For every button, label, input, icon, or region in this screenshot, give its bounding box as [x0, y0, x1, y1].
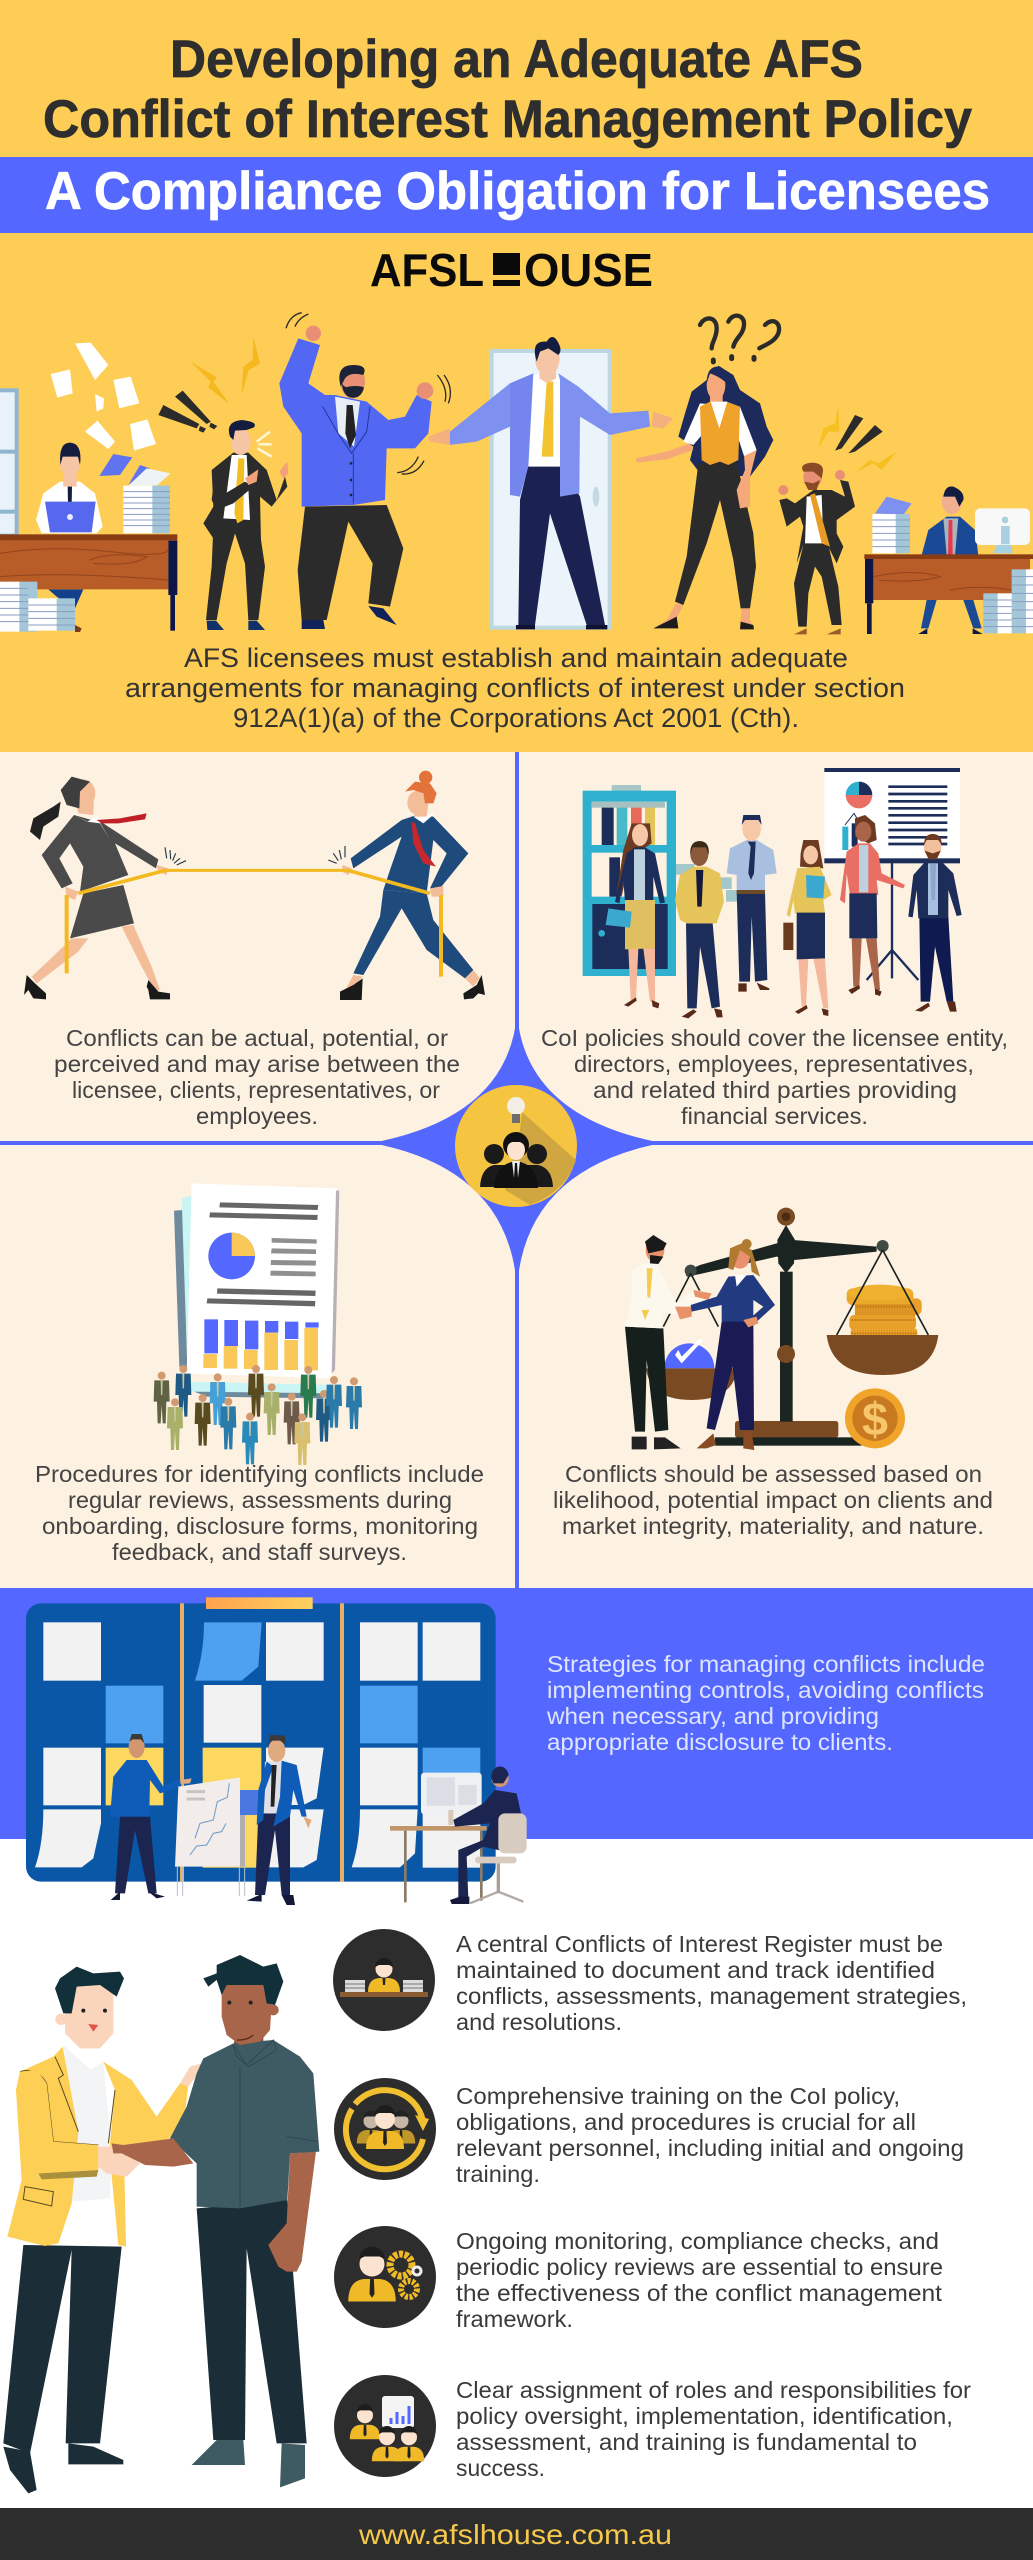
text: Comprehensive training on the CoI policy,: [456, 2083, 900, 2109]
blue dividers and star: [0, 752, 1033, 1588]
man in yellow shirt: [675, 841, 724, 1018]
hero illustration: office conflict scene right: [428, 316, 1033, 634]
handshake and yellow sleeve: [16, 2070, 193, 2177]
hero paragraph: 912A(1)(a) of the Corporations Act 2001 (Cth).: [233, 703, 799, 733]
blue strategies band: [0, 1588, 1033, 1839]
panel text: conflict types: Conflicts can be actual, potential, or: [66, 1025, 448, 1051]
hero paragraph: [125, 643, 905, 733]
desk: [0, 534, 177, 631]
paper stack on desk: [123, 486, 170, 533]
icon: person with gears: [334, 2226, 436, 2328]
man in blue sweater: [110, 1734, 192, 1900]
icon: presentation: [334, 2375, 436, 2477]
strategies text: Strategies for managing conflicts include: [547, 1651, 985, 1677]
hero paragraph: arrangements for managing conflicts of interest under section: [125, 673, 905, 703]
panel: assessing conflicts (scales): [625, 1208, 938, 1450]
bookshelf: [583, 785, 738, 976]
crowd of small figures: [154, 1365, 362, 1465]
small angry man: [203, 420, 288, 630]
coins on scale pan: [827, 1250, 938, 1448]
text: policy oversight, implementation, identification,: [456, 2403, 953, 2429]
panel: policy coverage (team): [583, 768, 962, 1018]
lightning bolts: [190, 337, 260, 404]
door: [492, 351, 610, 628]
man in blue shirt: [727, 815, 777, 992]
balance scale: [646, 1208, 889, 1446]
floor paper stacks: [0, 582, 75, 632]
panel text: policy coverage: CoI policies should cover the licensee entity,: [541, 1025, 1008, 1051]
subtitle band: A Compliance Obligation for Licensees: [45, 162, 990, 221]
paper stack on right desk: [872, 497, 912, 553]
panel text: conflict types: employees.: [196, 1103, 318, 1129]
logo: AFSL: [370, 244, 484, 296]
icon: register desk: [333, 1929, 435, 2031]
question marks: [700, 316, 779, 362]
panel text: identifying conflicts: feedback, and staff surveys.: [112, 1539, 407, 1565]
text: the effectiveness of the conflict management: [456, 2280, 942, 2306]
text: maintained to document and track identified: [456, 1957, 935, 1983]
seated worker: [36, 443, 103, 632]
panel text: identifying conflicts: regular reviews, assessments during: [68, 1487, 452, 1513]
small bearded man: [778, 463, 855, 634]
title: [43, 30, 972, 149]
panel text: assessing conflicts: Conflicts should be assessed based on: [565, 1461, 982, 1487]
businesswoman in navy jacket: [691, 1239, 775, 1450]
white lower background: [0, 1839, 1033, 2508]
woman in coral jacket: [840, 815, 905, 996]
list item 2: [334, 2078, 964, 2187]
text: [456, 2377, 971, 2481]
exclamation marks and lightning: [818, 406, 897, 473]
strategies text: [546, 1651, 985, 1755]
monitor: [975, 508, 1030, 553]
text: assessment, and training is fundamental to: [456, 2429, 917, 2455]
text: relevant personnel, including initial and ongoing: [456, 2135, 964, 2161]
cream panels background: [0, 752, 1033, 1588]
right businesswoman: [328, 771, 485, 1000]
man in blue jacket: [247, 1735, 312, 1905]
logo: OUSE: [524, 244, 653, 296]
panel text: identifying conflicts: [35, 1461, 484, 1565]
coins on scale pan: $: [862, 1393, 888, 1445]
title: Conflict of Interest Management Policy: [43, 90, 972, 149]
bearded man in navy suit: [908, 834, 962, 1012]
exclamation marks: [158, 391, 217, 433]
panel text: identifying conflicts: Procedures for identifying conflicts include: [35, 1461, 484, 1487]
list item 1: [333, 1929, 967, 2035]
panel text: assessing conflicts: [553, 1461, 993, 1539]
text: conflicts, assessments, management strategies,: [456, 1983, 967, 2009]
panel text: conflict types: perceived and may arise between the: [54, 1051, 460, 1077]
board: [26, 1597, 496, 1882]
text: success.: [456, 2455, 545, 2481]
text: A central Conflicts of Interest Register must be: [456, 1931, 943, 1957]
strategies text: appropriate disclosure to clients.: [547, 1729, 893, 1755]
panel text: conflict types: [54, 1025, 460, 1129]
text: Ongoing monitoring, compliance checks, and: [456, 2228, 939, 2254]
text: obligations, and procedures is crucial for all: [456, 2109, 916, 2135]
strategy board illustration: [26, 1597, 527, 1905]
panel text: identifying conflicts: onboarding, disclosure forms, monitoring: [42, 1513, 478, 1539]
right desk: [864, 554, 1033, 634]
report document: [174, 1183, 339, 1398]
panel text: policy coverage: and related third parties providing: [593, 1077, 957, 1103]
worried man at desk: [918, 486, 983, 634]
man in yellow jacket: [3, 1967, 202, 2493]
right floor paper stacks: [983, 569, 1033, 633]
text: framework.: [456, 2306, 573, 2332]
central man in light blue jacket: [428, 337, 673, 629]
woman with briefcase: [783, 840, 832, 1016]
text: Clear assignment of roles and responsibilities for: [456, 2377, 971, 2403]
header and hero background: [0, 0, 1033, 752]
text: and resolutions.: [456, 2009, 622, 2035]
desk and seated worker: [390, 1767, 527, 1904]
woman with folder: [606, 823, 665, 1008]
text: training.: [456, 2161, 540, 2187]
left businesswoman: [24, 777, 186, 999]
panel text: assessing conflicts: market integrity, materiality, and nature.: [562, 1513, 984, 1539]
text: [456, 2083, 964, 2187]
hero illustration: office conflict scene left: [0, 313, 450, 632]
panel text: conflict types: licensee, clients, representatives, or: [72, 1077, 440, 1103]
panel text: policy coverage: financial services.: [681, 1103, 868, 1129]
window: [0, 388, 19, 535]
flying papers: [51, 343, 171, 486]
text: periodic policy reviews are essential to ensure: [456, 2254, 943, 2280]
footer bar: [0, 2508, 1033, 2560]
hero paragraph: AFS licensees must establish and maintain adequate: [184, 643, 848, 673]
big shouting man in blue jacket: [279, 313, 450, 629]
logo: [370, 244, 653, 296]
text: [456, 1931, 967, 2035]
footer bar: www.afslhouse.com.au: [358, 2519, 672, 2550]
rope: [67, 870, 441, 977]
panel text: policy coverage: [541, 1025, 1008, 1129]
centre icon: team with light bulb: [455, 1085, 577, 1207]
strategies text: implementing controls, avoiding conflicts: [547, 1677, 984, 1703]
businessman in white shirt: [625, 1235, 712, 1449]
text: [456, 2228, 943, 2332]
icon: training cycle: [334, 2078, 436, 2180]
strategies text: when necessary, and providing: [546, 1703, 879, 1729]
panel: identifying conflicts (report and crowd): [154, 1183, 362, 1465]
illustration: two men shaking hands: [3, 1955, 319, 2493]
presentation board: [824, 768, 960, 980]
flip chart: [175, 1777, 260, 1896]
list item 4: [334, 2375, 971, 2481]
man in teal shirt: [170, 1955, 319, 2487]
title: Developing an Adequate AFS: [170, 30, 863, 89]
sticky notes: [35, 1622, 480, 1868]
panel text: policy coverage: directors, employees, representatives,: [574, 1051, 974, 1077]
panel text: assessing conflicts: likelihood, potential impact on clients and: [553, 1487, 993, 1513]
panel: conflict types (tug of war): [24, 771, 485, 1000]
list item 3: [334, 2226, 943, 2332]
woman with hair and orange vest: [636, 366, 773, 629]
